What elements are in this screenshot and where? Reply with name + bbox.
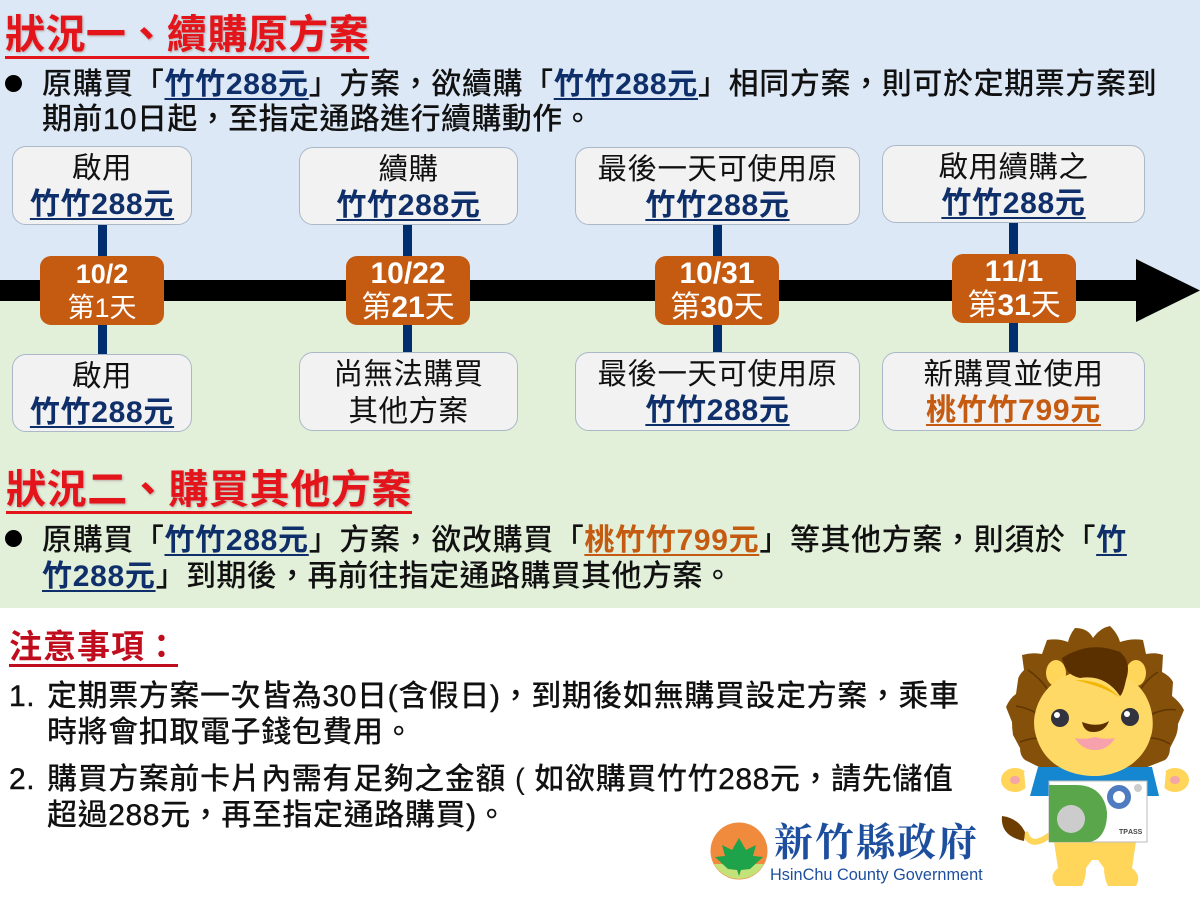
connector stem 3	[713, 225, 722, 353]
line 1: 原購買「竹竹288元」方案，欲續購「竹竹288元」相同方案，則可於定期票方案到	[42, 68, 1157, 101]
card: bottom 4: 桃竹竹799元	[926, 394, 1101, 427]
arms	[1001, 768, 1029, 792]
nose	[1082, 721, 1109, 732]
note 2 line 2: 超過288元，再至指定通路購買)。	[47, 799, 507, 832]
card: bottom 3: 竹竹288元	[645, 394, 790, 427]
line 2: 期前10日起，至指定通路進行續購動作。	[42, 103, 593, 136]
date badge 2	[346, 256, 470, 325]
card: top 2: 竹竹288元	[336, 189, 481, 222]
card: top 2: 續購	[378, 153, 438, 186]
date badge 4: 11/1	[985, 255, 1043, 288]
line 2: 竹288元」到期後，再前往指定通路購買其他方案。	[42, 560, 733, 593]
heading: situation two: 狀況二、購買其他方案	[6, 468, 412, 512]
date badge 4: 第31天	[967, 289, 1061, 322]
date badge 1: 10/2	[76, 259, 128, 289]
forelock	[1062, 647, 1128, 696]
icon: bullet	[5, 75, 22, 92]
timeline arrow	[0, 259, 1200, 322]
card: top 4	[882, 145, 1145, 223]
card: bottom 2: 尚無法購買	[333, 358, 484, 391]
card: bottom 1: 啟用	[72, 360, 132, 393]
notes list	[9, 680, 960, 832]
logo: Hsinchu County Government	[710, 822, 983, 884]
date badge 3	[655, 256, 779, 325]
card: top 2	[299, 147, 518, 225]
mouth	[1075, 737, 1115, 750]
note 2 number: 2.	[9, 763, 35, 796]
card: top 4: 竹竹288元	[941, 187, 1086, 220]
card: bottom 4	[882, 352, 1145, 431]
date badge 4	[952, 254, 1076, 323]
note 1 line 2: 時將會扣取電子錢包費用。	[47, 716, 414, 749]
tail	[1025, 832, 1050, 842]
date badge 3: 第30天	[670, 291, 764, 324]
text block: situation one description	[5, 68, 1157, 136]
eyes	[1051, 709, 1069, 727]
mane	[1006, 626, 1184, 770]
card: top 4: 啟用續購之	[938, 151, 1088, 184]
connector stem 4	[1009, 223, 1018, 353]
card: top 3: 竹竹288元	[645, 189, 790, 222]
card: bottom 3	[575, 352, 860, 431]
text block: situation two description	[5, 524, 1127, 593]
logo english name: HsinChu County Government	[770, 866, 983, 884]
panel: situation two background	[0, 290, 1200, 608]
shirt	[1030, 767, 1159, 825]
card: top 1: 啟用	[72, 152, 132, 185]
date badge 1	[40, 256, 164, 325]
card: top 3: 最後一天可使用原	[597, 153, 838, 186]
date badge 2: 第21天	[361, 291, 455, 324]
icon: bullet	[5, 530, 22, 547]
TPASS card: TPASS	[1119, 829, 1143, 836]
heading: situation one: 狀況一、續購原方案	[5, 13, 369, 57]
card: top 1: 竹竹288元	[30, 188, 174, 221]
logo chinese name: 新竹縣政府	[774, 822, 979, 865]
TPASS card	[1049, 781, 1147, 842]
card: bottom 2: 其他方案	[348, 395, 468, 428]
note 2 line 1: 購買方案前卡片內需有足夠之金額 ( 如欲購買竹竹288元，請先儲值	[47, 763, 954, 796]
heading: notes: 注意事項：	[9, 628, 179, 665]
date badge 1: 第1天	[67, 293, 137, 323]
card: bottom 4: 新購買並使用	[923, 358, 1104, 391]
card: top 1	[12, 146, 192, 225]
line 1: 原購買「竹竹288元」方案，欲改購買「桃竹竹799元」等其他方案，則須於「竹	[42, 524, 1127, 557]
note 1 number: 1.	[9, 680, 35, 713]
card: bottom 1	[12, 354, 192, 432]
connector stem 2	[403, 225, 412, 353]
card: bottom 1: 竹竹288元	[30, 396, 174, 429]
head	[1034, 670, 1153, 776]
card: top 3	[575, 147, 860, 225]
date badge 3: 10/31	[679, 257, 755, 290]
card: bottom 3: 最後一天可使用原	[597, 358, 838, 391]
icon: county emblem	[710, 822, 768, 880]
ears	[1046, 660, 1066, 686]
connector stem 1	[98, 225, 107, 355]
date badge 2: 10/22	[370, 257, 446, 290]
panel: situation one background	[0, 0, 1200, 290]
note 1 line 1: 定期票方案一次皆為30日(含假日)，到期後如無購買設定方案，乘車	[47, 680, 960, 713]
mascot: lion holding TPASS card	[1001, 626, 1189, 886]
card: bottom 2	[299, 352, 518, 431]
legs	[1052, 835, 1138, 886]
